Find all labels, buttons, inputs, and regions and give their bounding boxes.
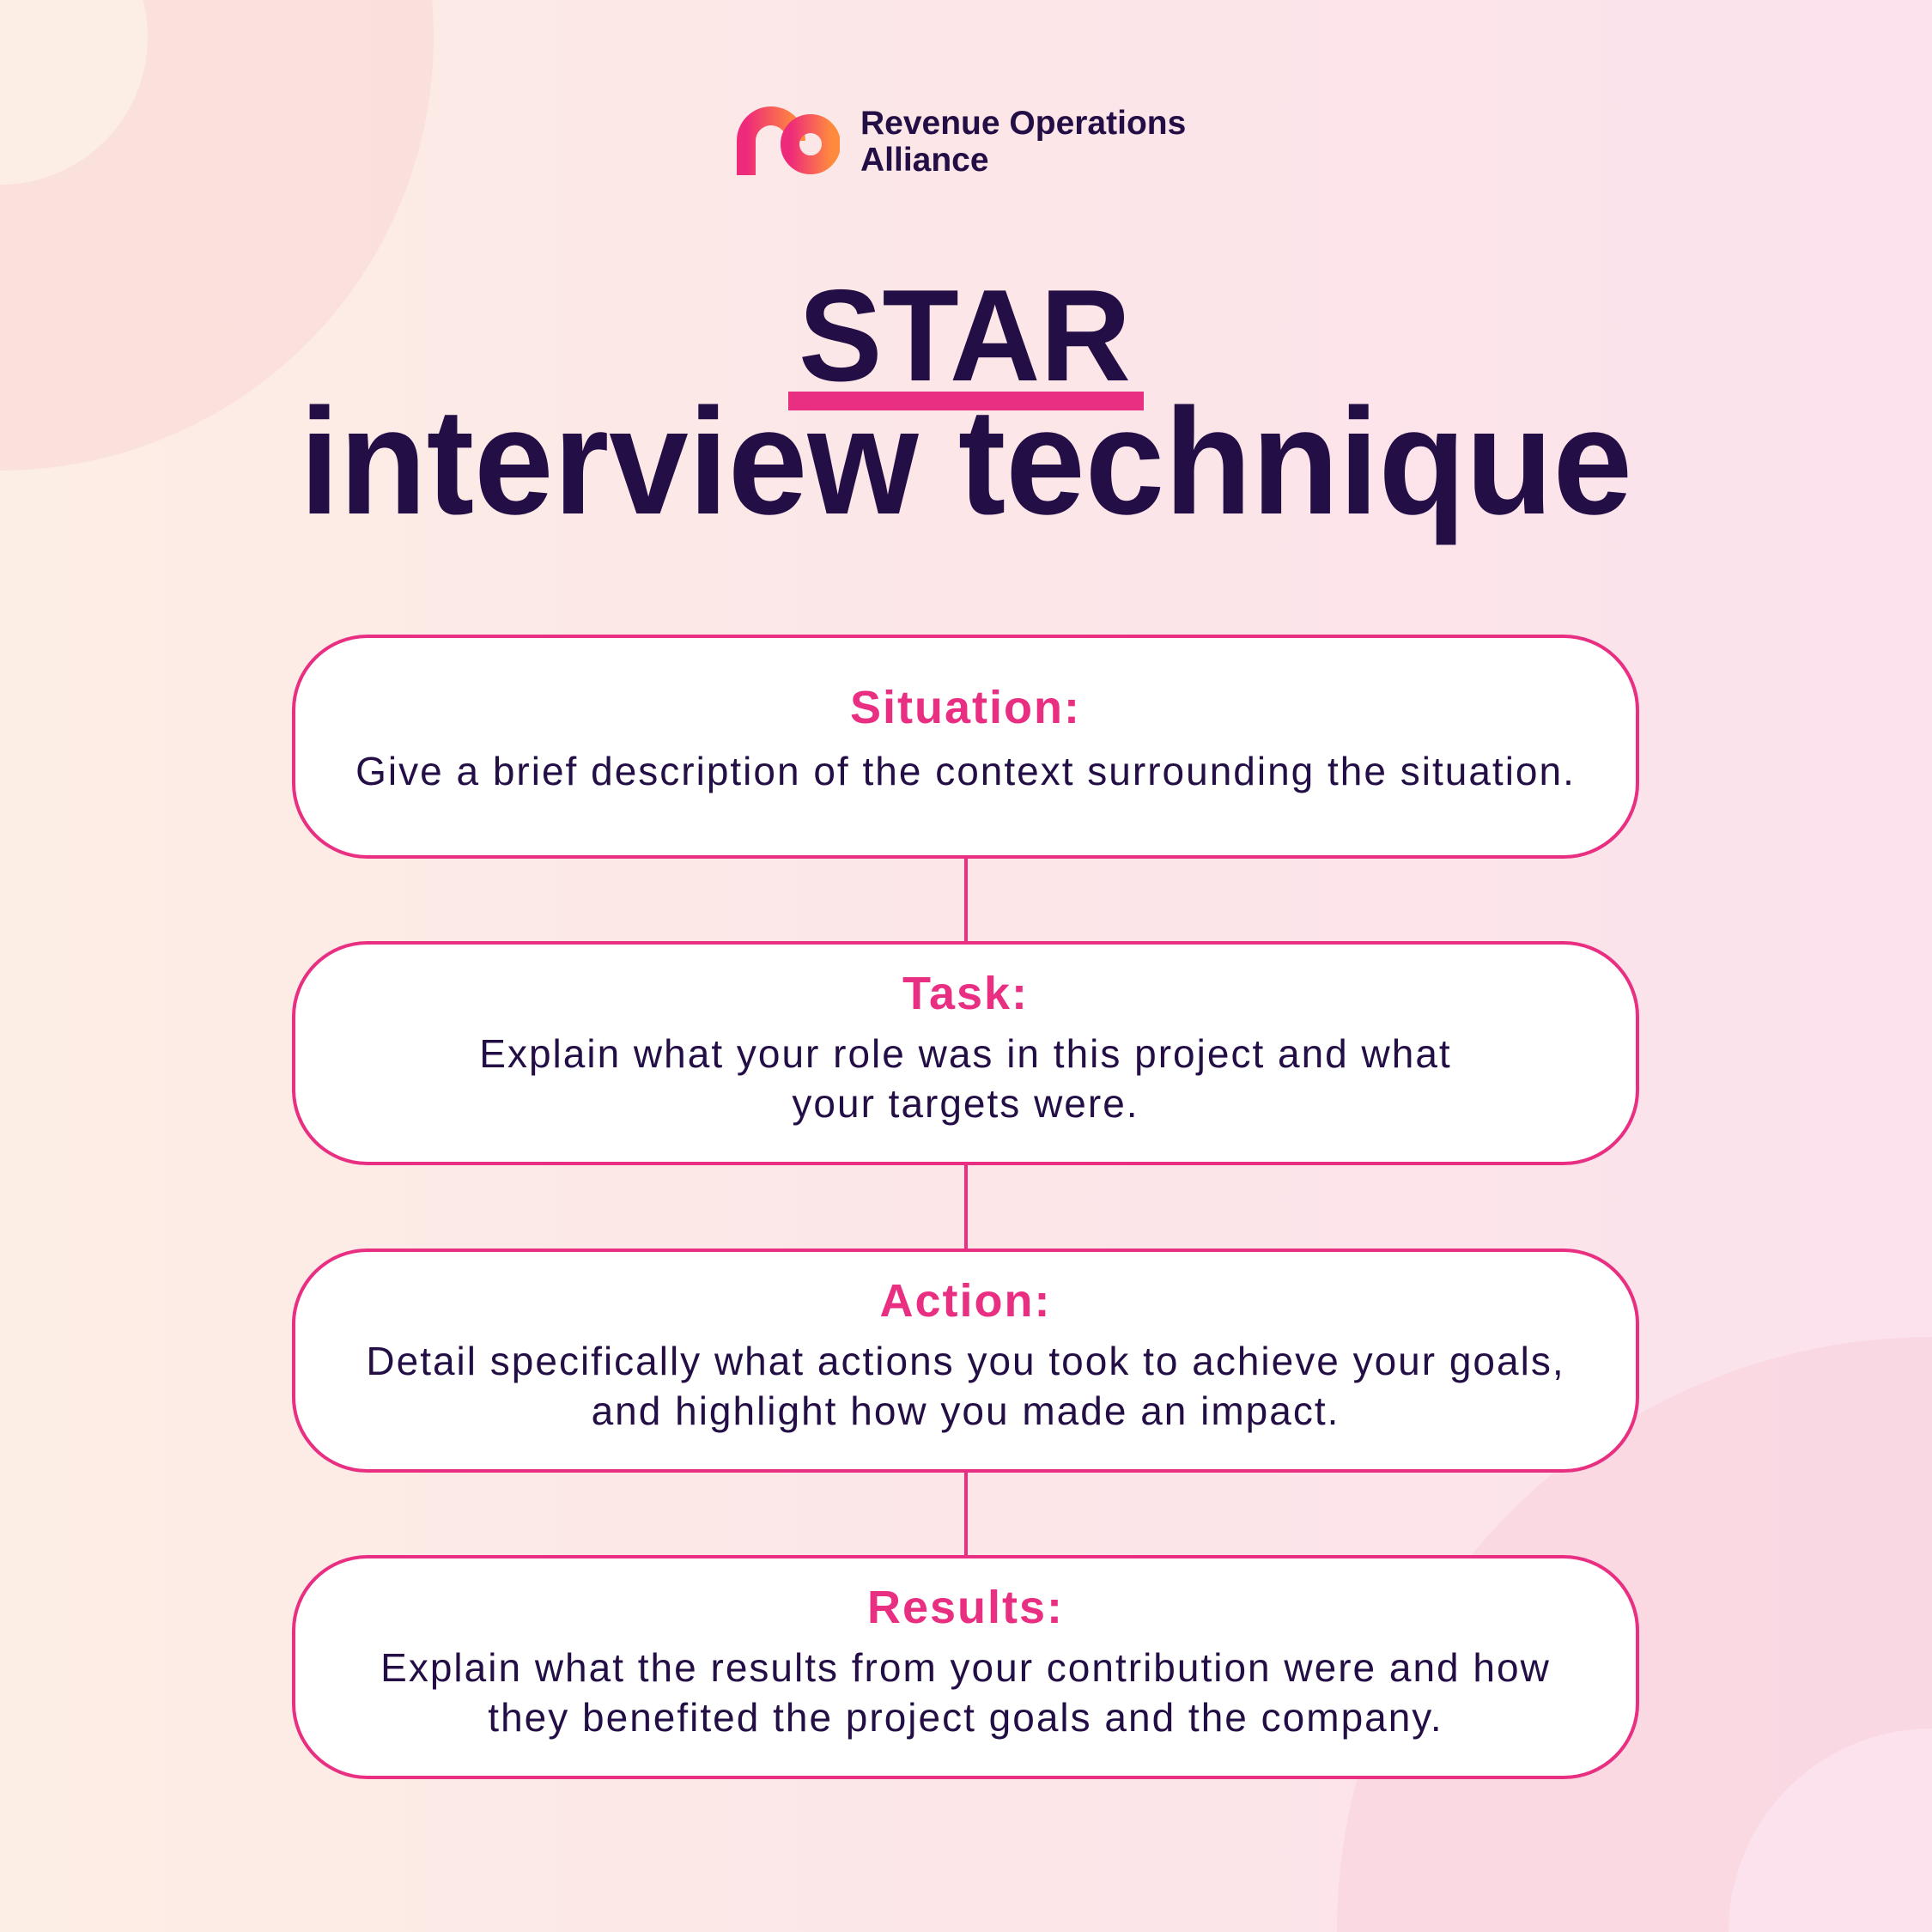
panel: situation (292, 635, 1639, 859)
panel: task: your targets were. (792, 1081, 1139, 1126)
logo text (860, 105, 1186, 179)
panel: action: and highlight how you made an impact. (592, 1388, 1340, 1433)
panel: results: Explain what the results from your contribution were and how (380, 1645, 1551, 1690)
panel: task (292, 941, 1639, 1165)
panel: action: Action: (880, 1275, 1051, 1327)
title (300, 275, 1632, 546)
panel: situation: Situation: (850, 682, 1081, 733)
panel: situation: Give a brief description of the context surrounding the situation. (355, 749, 1576, 793)
panel: results: Results: (867, 1582, 1064, 1633)
panel: action: Detail specifically what actions you took to achieve your goals, (366, 1339, 1565, 1383)
panel: task: Explain what your role was in this project and what (479, 1031, 1452, 1076)
panel: results (292, 1555, 1639, 1779)
icon: logo mark (737, 106, 840, 175)
logo text: Revenue Operations (860, 105, 1186, 142)
panel: action (292, 1249, 1639, 1473)
panel: results: they benefited the project goals and the company. (488, 1695, 1443, 1740)
logo (737, 105, 1186, 179)
panel: task: Task: (902, 968, 1029, 1019)
logo text: Alliance (860, 142, 989, 179)
